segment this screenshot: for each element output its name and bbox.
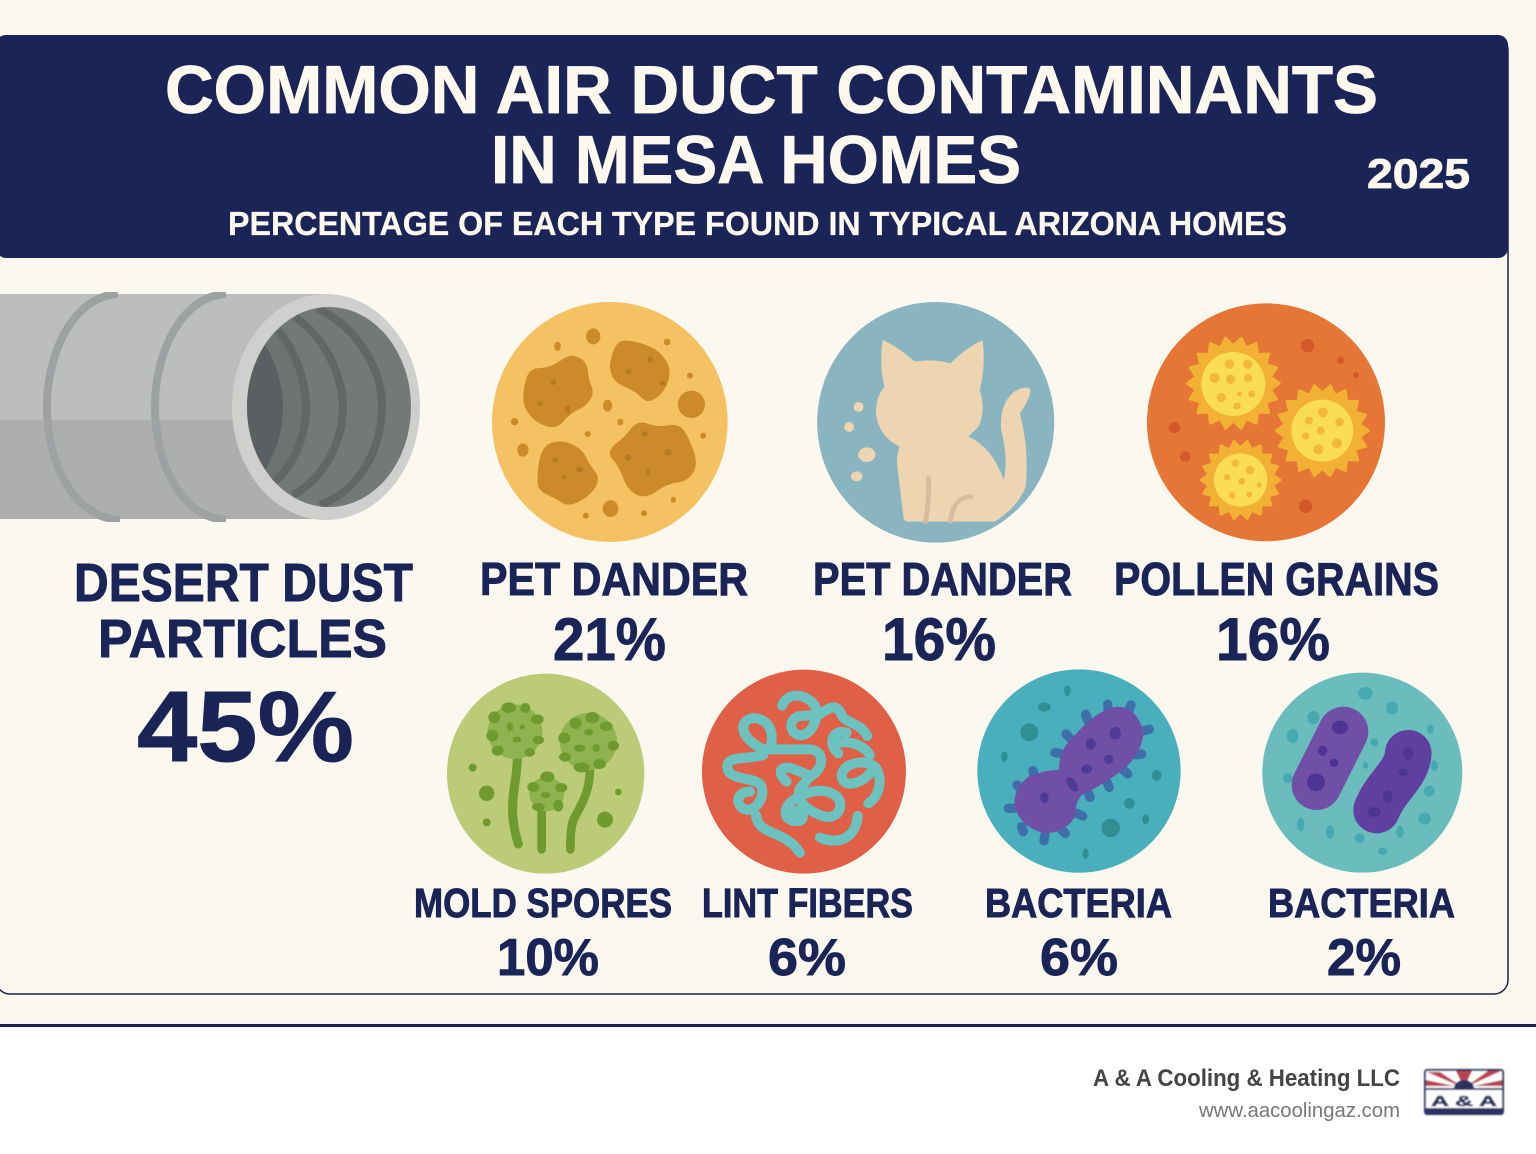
icon: bacteria cluster [977, 669, 1181, 873]
label: desert dust particles 45%: PARTICLES [98, 609, 387, 669]
label: bacteria 6%: BACTERIA [985, 880, 1172, 926]
label: mold spores 10%: 10% [497, 929, 599, 987]
label: pet dander 16%: PET DANDER [813, 553, 1072, 605]
title: COMMON AIR DUCT CONTAMINANTS [165, 52, 1378, 128]
icon: desert dust [492, 302, 728, 542]
label: bacteria 2% [1268, 880, 1455, 987]
label: lint fibers 6%: 6% [768, 929, 846, 987]
year: 2025 [1367, 150, 1470, 197]
footer company text [1093, 1065, 1400, 1122]
header banner [0, 35, 1508, 258]
icon: company logo: A & A [1431, 1093, 1497, 1110]
icon: mold spores [447, 674, 644, 874]
label: pet dander 21%: PET DANDER [480, 553, 748, 605]
label: pet dander 21%: 21% [553, 606, 666, 673]
icon: pet dander cat [817, 302, 1054, 543]
label: bacteria 6% [985, 880, 1172, 987]
subtitle: PERCENTAGE OF EACH TYPE FOUND IN TYPICAL ARIZONA HOMES [228, 205, 1287, 242]
footer rule [0, 1024, 1536, 1027]
label: desert dust particles 45%: 45% [137, 671, 354, 783]
footer company text: www.aacoolingaz.com [1198, 1100, 1400, 1122]
label: pet dander 21% [480, 553, 748, 673]
label: lint fibers 6%: LINT FIBERS [702, 880, 913, 926]
label: bacteria 2%: BACTERIA [1268, 880, 1455, 926]
label: mold spores 10%: MOLD SPORES [414, 880, 672, 926]
icon: air duct [0, 294, 420, 520]
icon: pollen grains [1147, 303, 1385, 541]
icon: rod bacteria [1262, 673, 1462, 873]
label: mold spores 10% [414, 880, 672, 987]
label: pollen grains 16% [1114, 553, 1439, 673]
label: desert dust particles 45%: DESERT DUST [74, 553, 413, 613]
label: lint fibers 6% [702, 880, 913, 987]
label: pollen grains 16%: POLLEN GRAINS [1114, 553, 1439, 605]
title [165, 52, 1378, 198]
footer company text: A & A Cooling & Heating LLC [1093, 1065, 1400, 1092]
label: pet dander 16%: 16% [882, 606, 996, 673]
label: desert dust particles 45% [74, 553, 413, 783]
icon: company logo [1425, 1070, 1503, 1114]
label: pet dander 16% [813, 553, 1072, 673]
label: pollen grains 16%: 16% [1216, 606, 1330, 673]
icon: lint fibers [702, 670, 906, 874]
label: bacteria 2%: 2% [1327, 929, 1401, 987]
label: bacteria 6%: 6% [1040, 929, 1118, 987]
title: IN MESA HOMES [491, 122, 1021, 198]
